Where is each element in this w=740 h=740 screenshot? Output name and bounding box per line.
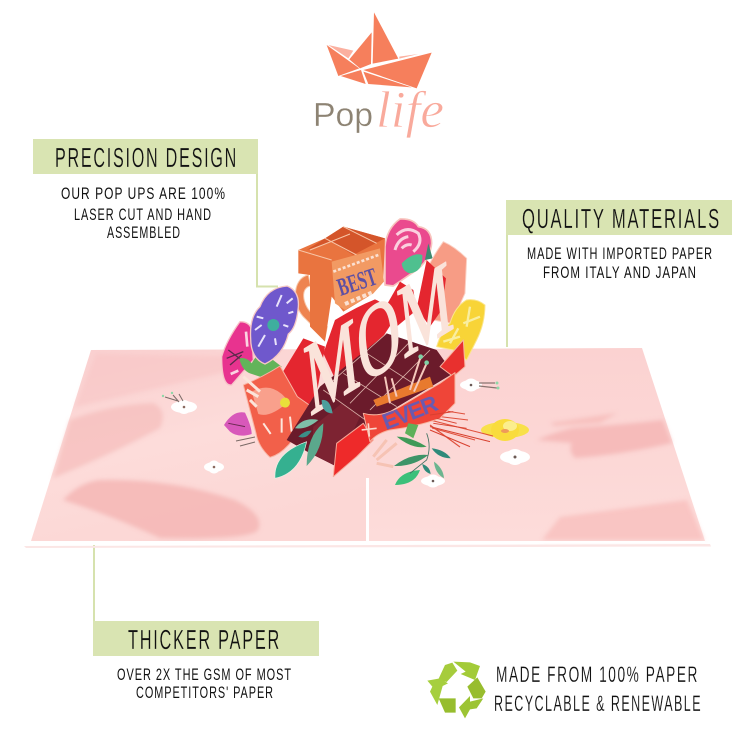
callout: thicker paper [93, 621, 319, 702]
yellow flowers [437, 300, 485, 360]
heading: THICKER PAPER [128, 624, 281, 655]
description: OVER 2X THE GSM OF MOST [117, 665, 292, 684]
recycling note [427, 662, 702, 718]
small magenta flower [224, 412, 252, 436]
pop-up card base [24, 348, 711, 548]
description: ASSEMBLED [107, 223, 181, 242]
callout: precision design [33, 139, 258, 242]
description [117, 665, 292, 702]
upper right coral flower [423, 242, 467, 323]
description [527, 244, 713, 282]
red MOM backing [280, 260, 446, 417]
icon: recycle arrows [427, 662, 486, 718]
green stems lower left [236, 437, 255, 446]
card bottom shadow line [24, 544, 711, 548]
connector lines [93, 174, 508, 622]
lily bud [373, 440, 397, 467]
ribbon banner [333, 340, 465, 477]
heading band [33, 139, 258, 174]
pink flower left [222, 322, 253, 385]
ribbon text: EVER [378, 390, 441, 435]
green and teal leaves [275, 400, 451, 485]
purple flower [251, 286, 298, 364]
recycling text [494, 662, 702, 716]
white flower right top [460, 378, 500, 392]
red and pink sprays [430, 410, 493, 447]
description: OUR POP UPS ARE 100% [61, 184, 226, 203]
icon: origami boat [327, 12, 432, 88]
description [61, 184, 226, 242]
card right panel [367, 348, 705, 541]
logo word: life: life [376, 82, 444, 139]
yellow flower [481, 419, 529, 441]
white flower top left [162, 392, 197, 414]
coral big flower [243, 366, 312, 457]
MOM letters: MOM [300, 238, 457, 438]
pop-up sculpture: Best Mom Ever [222, 219, 490, 485]
trophy plaque text: BEST [334, 263, 381, 302]
logo: Poplife [313, 12, 444, 139]
card left panel [31, 349, 367, 541]
watercolor brush strokes [53, 354, 704, 540]
heading band [93, 621, 319, 656]
card decorations: small flowers and stems [162, 378, 530, 488]
heading band [506, 200, 732, 235]
white flower right bottom [421, 474, 445, 488]
white flower right lower [500, 449, 530, 465]
description: COMPETITORS' PAPER [136, 683, 274, 702]
white flower lower left [204, 460, 224, 474]
logo word: Pop: Pop [313, 96, 373, 133]
heading: PRECISION DESIGN [55, 142, 238, 173]
pink rose [385, 219, 433, 286]
red stamens [430, 412, 490, 447]
center fold [366, 478, 369, 542]
flower stamens [385, 354, 429, 403]
bottom white line [31, 541, 705, 543]
description: LASER CUT AND HAND [74, 205, 212, 224]
dark maroon lattice base [287, 333, 453, 467]
green leaves left [239, 350, 282, 380]
trophy [295, 227, 385, 342]
callout: quality materials [506, 200, 732, 282]
